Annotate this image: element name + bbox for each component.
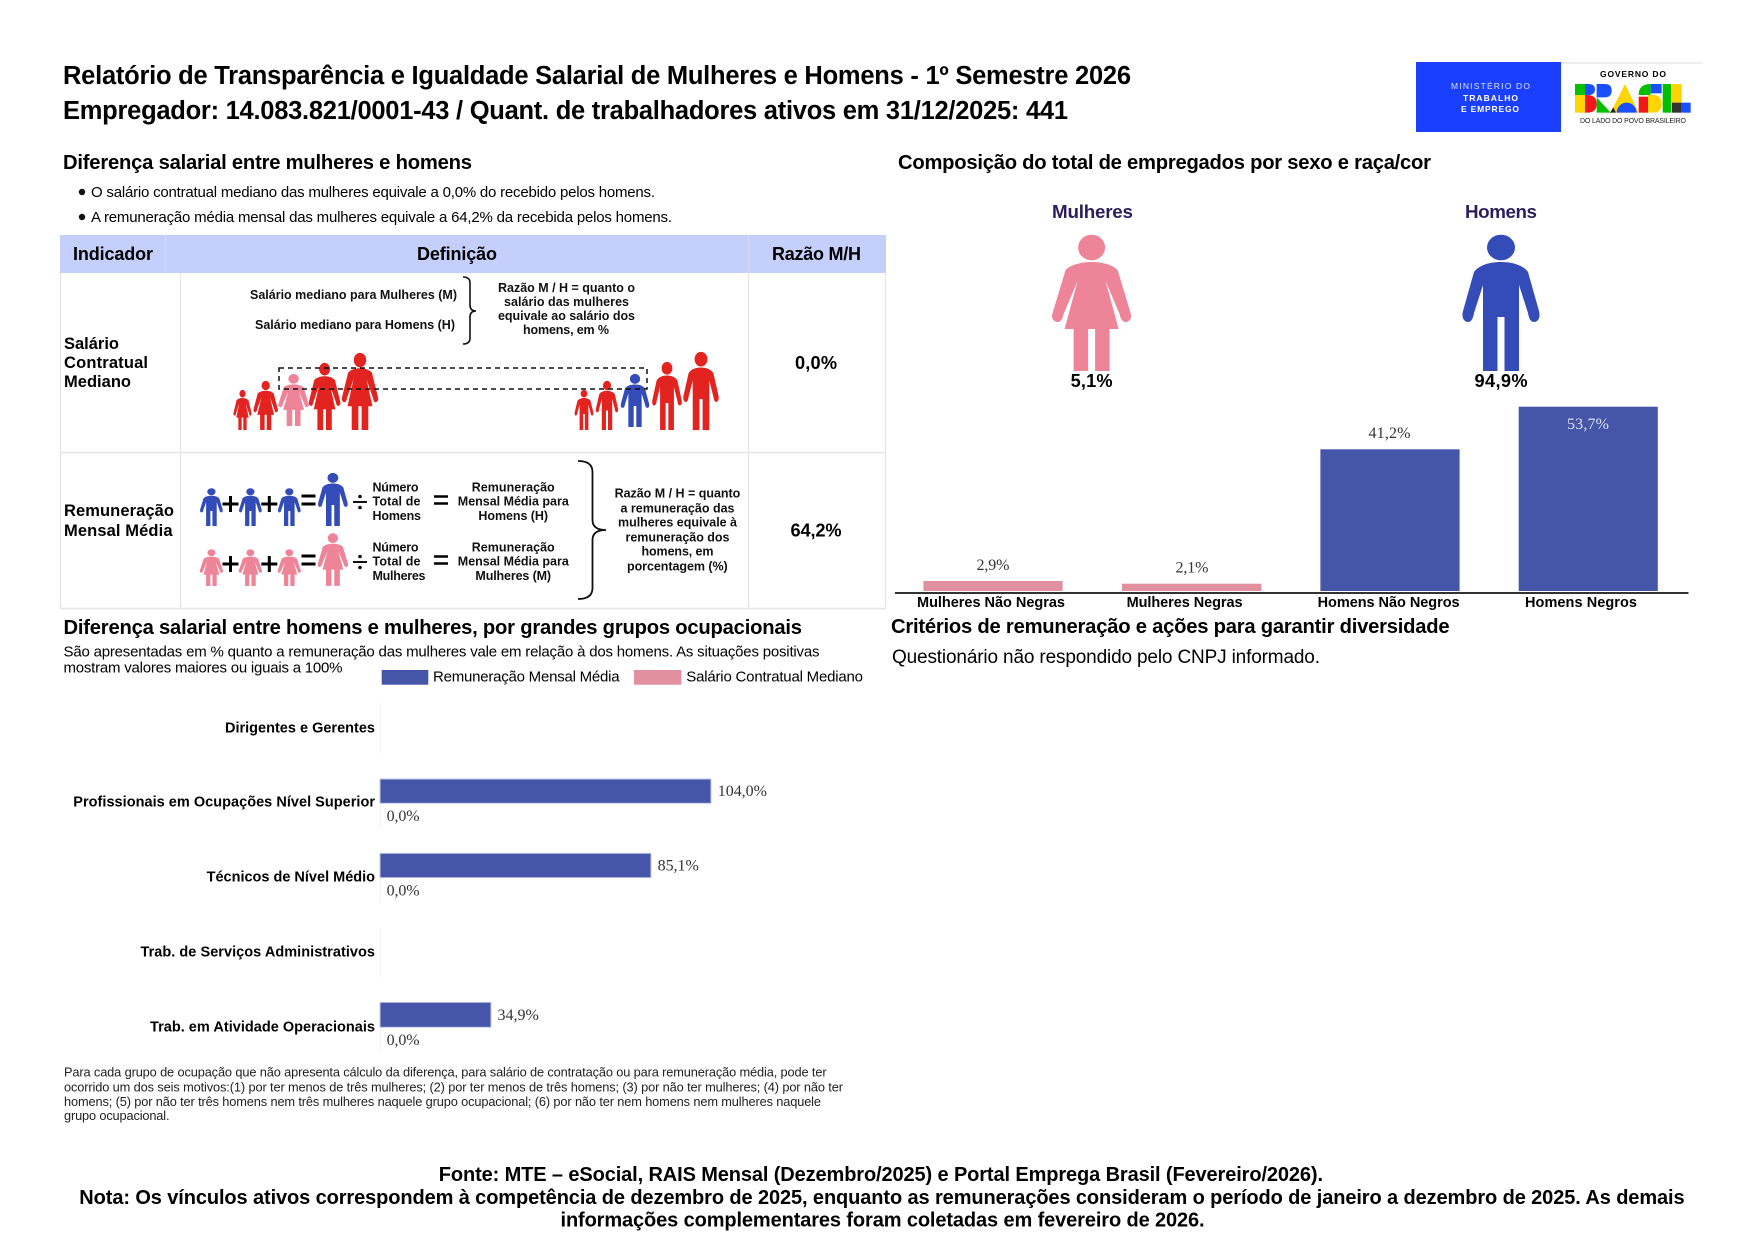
logo: ministry and government: TRABALHO [1463,93,1518,103]
ratio explanation: remuneração dos [626,531,730,545]
panel: workforce composition [895,152,1688,611]
horizontal bar chart: Técnicos de Nível Médio [207,870,375,886]
logo: ministry and government: MINISTÉRIO DO [1451,81,1530,91]
ratio explanation [498,281,635,337]
row label: Remuneração [64,502,174,520]
description: São apresentadas em % quanto a remuneração das mulheres vale em relação à dos homens. As situações positivas [64,644,820,661]
value: 0,0%: 0,0% [795,353,837,373]
formula: women [200,533,570,586]
ratio explanation: porcentagem (%) [627,560,728,574]
bullet list [79,184,672,226]
title: Empregador: 14.083.821/0001-43 / Quant. de trabalhadores ativos em 31/12/2025: 441 [63,97,1068,125]
horizontal bar chart: 0,0% [387,808,420,825]
definition labels: Salário mediano para Homens (H) [255,318,455,332]
horizontal bar chart: 85,1% [658,858,699,875]
horizontal bar chart: 0,0% [387,1032,420,1049]
ratio explanation: homens, em [642,545,714,559]
formula: men: Total de [372,495,421,509]
legend [382,669,863,686]
legend: Remuneração Mensal Média [433,669,620,686]
horizontal bar chart: Trab. em Atividade Operacionais [150,1020,375,1036]
brace [463,277,476,344]
formula: men: Número [372,481,419,495]
ratio explanation: equivale ao salário dos [498,309,635,323]
formula: men: Homens [372,509,421,523]
men share [1462,201,1540,391]
heading: occupational groups: Diferença salarial entre homens e mulheres, por grandes grupos ocupacionais [64,617,802,639]
heading: criteria: Critérios de remuneração e ações para garantir diversidade [891,616,1450,638]
footnote [64,1065,844,1123]
footnote: grupo ocupacional. [64,1108,170,1123]
horizontal bar chart: 34,9% [498,1007,539,1024]
ratio explanation: a remuneração das [620,501,735,515]
horizontal bar chart [73,703,767,1051]
horizontal bar chart: 104,0% [718,783,767,800]
formula: women: Remuneração [472,541,555,555]
bar chart: sex and race: Mulheres Não Negras [917,595,1065,611]
table header [60,235,886,273]
title [63,62,1131,125]
panel: pay criteria [891,616,1450,668]
heading: composition: Composição do total de empregados por sexo e raça/cor [898,152,1431,174]
footnote: Para cada grupo de ocupação que não apresenta cálculo da diferença, para salário de contratação ou para remuneração média, pode ter [64,1065,827,1080]
bar chart: sex and race: 2,1% [1176,560,1208,577]
ratio explanation: homens, em % [523,323,609,337]
table header: Indicador [73,244,153,264]
row label: Contratual [64,354,148,372]
logo: ministry and government: E EMPREGO [1461,104,1519,114]
horizontal bar chart: Dirigentes e Gerentes [225,721,375,737]
row label [64,335,148,391]
row: salário contratual mediano [64,277,837,430]
bar chart: sex and race: Homens Negros [1525,595,1637,611]
source and note: Fonte: MTE – eSocial, RAIS Mensal (Dezembro/2025) e Portal Emprega Brasil (Fevereiro/2026). [439,1164,1323,1186]
formula: women: Mensal Média para [458,555,570,569]
men share: 94,9% [1474,371,1528,391]
bar chart: sex and race: 2,9% [976,557,1010,574]
dashed median box [279,368,647,389]
women share: Mulheres [1052,201,1133,222]
ratio explanation [615,487,741,574]
value: 64,2%: 64,2% [790,521,842,541]
ratio explanation: Razão M / H = quanto [615,487,741,501]
formula: women: Mulheres (M) [475,569,551,583]
horizontal bar chart: Profissionais em Ocupações Nível Superior [73,795,375,811]
formula: women: Total de [372,555,421,569]
horizontal bar chart: Trab. de Serviços Administrativos [140,945,375,961]
brace [578,461,606,599]
formula: men: Remuneração [472,481,555,495]
source and note [79,1164,1685,1232]
source and note: informações complementares foram coletadas em fevereiro de 2026. [560,1210,1205,1232]
women share: 5,1% [1071,371,1113,391]
table header: Definição [417,244,497,264]
logo: ministry and government [1416,62,1702,132]
row label [64,502,174,540]
criteria message: Questionário não respondido pelo CNPJ informado. [892,647,1320,668]
description [64,644,820,677]
bullet list: O salário contratual mediano das mulheres equivale a 0,0% do recebido pelos homens. [91,184,655,201]
row label: Mediano [64,373,131,391]
source and note: Nota: Os vínculos ativos correspondem à competência de dezembro de 2025, enquanto as remunerações consideram o período de janeiro a dezembro de 2025. As demais [79,1187,1685,1209]
footnote: ocorrido um dos seis motivos:(1) por ter menos de três mulheres; (2) por ter menos de três homens; (3) por não ter mulheres; (4) por não ter [64,1080,844,1095]
row label: Salário [64,335,119,353]
bar chart: sex and race [895,407,1688,611]
formula: women: Mulheres [372,569,426,583]
definition labels: Salário mediano para Mulheres (M) [250,288,457,302]
formula: men [200,473,570,526]
ratio explanation: mulheres equivale à [618,516,737,530]
bar chart: sex and race: Mulheres Negras [1127,595,1243,611]
formula: men: Homens (H) [478,509,548,523]
footnote: homens; (5) por não ter três homens nem três mulheres naquele grupo ocupacional; (6) por não ter nem homens nem mulheres naquele [64,1094,821,1109]
formula: women: Número [372,541,419,555]
row: remuneração mensal média [64,461,842,599]
table header: Razão M/H [772,244,861,264]
icons: women median [233,353,378,430]
logo: ministry and government: DO LADO DO POVO BRASILEIRO [1580,118,1687,125]
heading: salary difference: Diferença salarial entre mulheres e homens [63,152,472,174]
women share [1052,201,1133,391]
table [60,235,886,608]
row label: Mensal Média [64,522,173,540]
panel: salary difference [60,152,886,608]
icons: men median [575,352,719,430]
horizontal bar chart: 0,0% [387,883,420,900]
legend: Salário Contratual Mediano [686,669,863,686]
bullet list: A remuneração média mensal das mulheres equivale a 64,2% da recebida pelos homens. [91,209,672,226]
bar chart: sex and race: 41,2% [1368,425,1410,442]
bar chart: sex and race: Homens Não Negros [1318,595,1460,611]
ratio explanation: Razão M / H = quanto o [498,281,635,295]
ratio explanation: salário das mulheres [504,295,629,309]
logo: ministry and government: GOVERNO DO [1600,69,1666,79]
men share: Homens [1465,201,1537,222]
description: mostram valores maiores ou iguais a 100% [64,660,342,677]
bar chart: sex and race: 53,7% [1567,416,1609,433]
formula: men: Mensal Média para [458,495,570,509]
definition labels [250,288,457,332]
title: Relatório de Transparência e Igualdade Salarial de Mulheres e Homens - 1º Semestre 2026 [63,62,1131,90]
panel: occupational groups [64,617,863,1123]
